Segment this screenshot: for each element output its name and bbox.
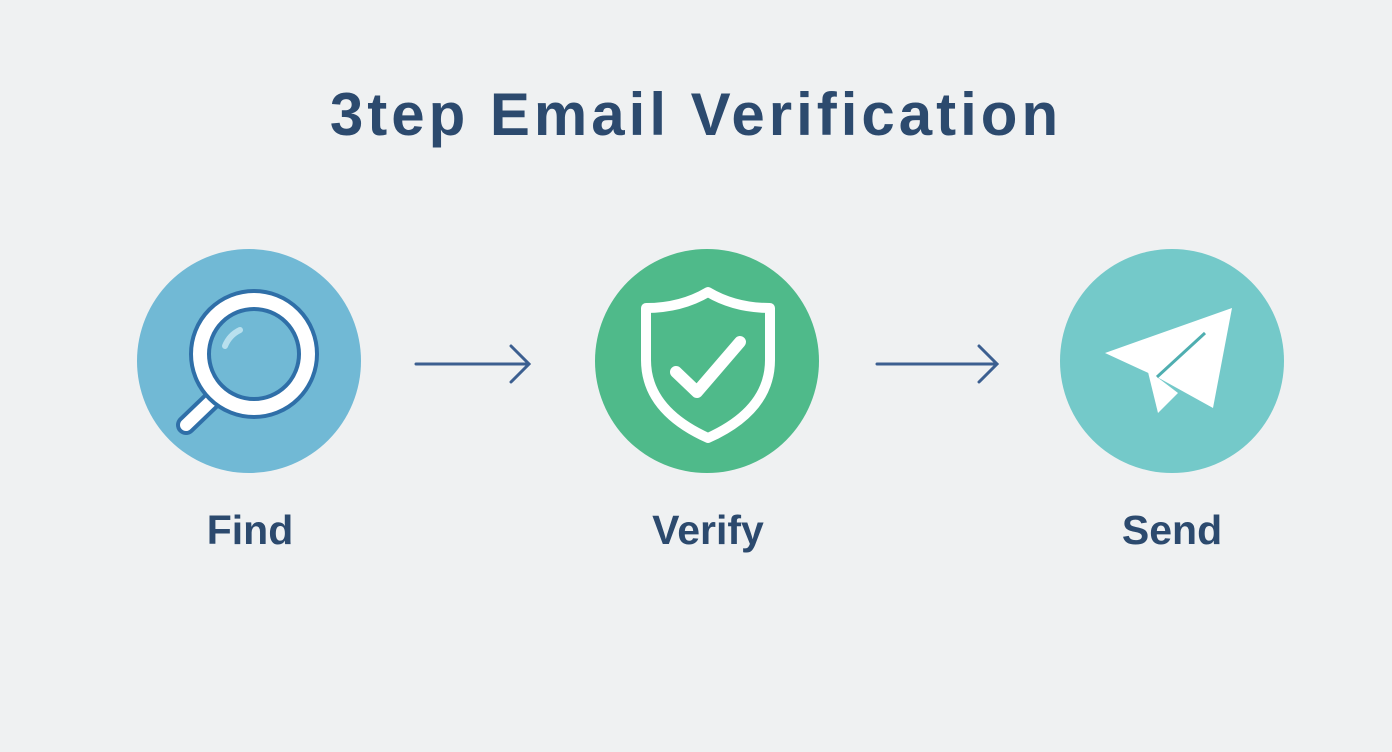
label: verify: Verify (652, 507, 764, 553)
label: find: Find (207, 507, 293, 553)
title: 3tep Email Verification (330, 81, 1062, 148)
step: send icon (1060, 249, 1284, 473)
label: send: Send (1122, 507, 1222, 553)
step: find icon (137, 249, 361, 473)
arrow 1 (416, 346, 529, 382)
step: verify icon (595, 249, 819, 473)
arrow 2 (877, 346, 997, 382)
